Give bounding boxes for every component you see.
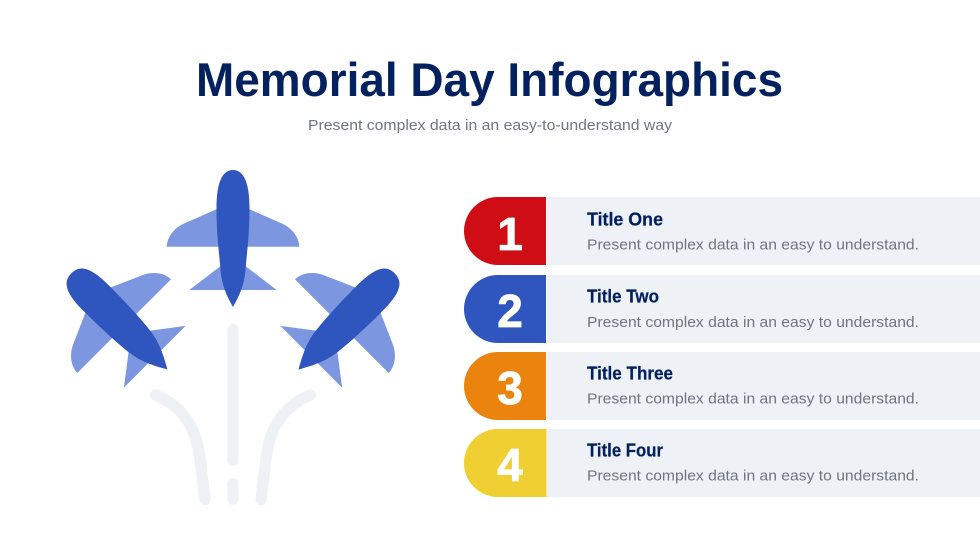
row 2 number: 2	[497, 285, 523, 337]
trail: left curve	[156, 395, 205, 500]
row 4 background bar	[547, 429, 980, 497]
row 2 title: Title Two	[587, 286, 659, 306]
row 4 number tab	[464, 429, 546, 497]
subtitle: Present complex data in an easy-to-understand way	[308, 117, 673, 134]
row 4	[464, 429, 980, 497]
trail: center line	[228, 324, 238, 505]
row 1 title: Title One	[587, 208, 663, 230]
row 2 background bar	[547, 275, 980, 343]
icon: center plane	[167, 170, 299, 307]
row 3 number: 3	[497, 362, 523, 414]
row 3 number tab	[464, 352, 546, 420]
row 3 title: Title Three	[587, 362, 673, 384]
trail: right curve	[261, 395, 310, 500]
row 1 description: Present complex data in an easy to understand.	[587, 236, 919, 254]
row 1 number: 1	[497, 208, 523, 260]
row 4 number: 4	[497, 439, 523, 491]
row 3 description: Present complex data in an easy to understand.	[587, 390, 919, 408]
row 4 title: Title Four	[587, 440, 663, 460]
row 4 description: Present complex data in an easy to understand.	[587, 468, 919, 484]
row 2 number tab	[464, 275, 546, 343]
row 2 description: Present complex data in an easy to understand.	[587, 314, 919, 331]
row 1 number tab	[464, 197, 546, 265]
icon: right plane	[252, 226, 442, 416]
title: Memorial Day Infographics	[196, 53, 783, 106]
row 3	[464, 352, 980, 420]
illustration: three planes with trails	[24, 170, 442, 505]
row 1 background bar	[547, 197, 980, 265]
row 3 background bar	[547, 352, 980, 420]
row 1	[464, 197, 980, 265]
icon: left plane	[24, 226, 214, 416]
row 2	[464, 275, 980, 343]
